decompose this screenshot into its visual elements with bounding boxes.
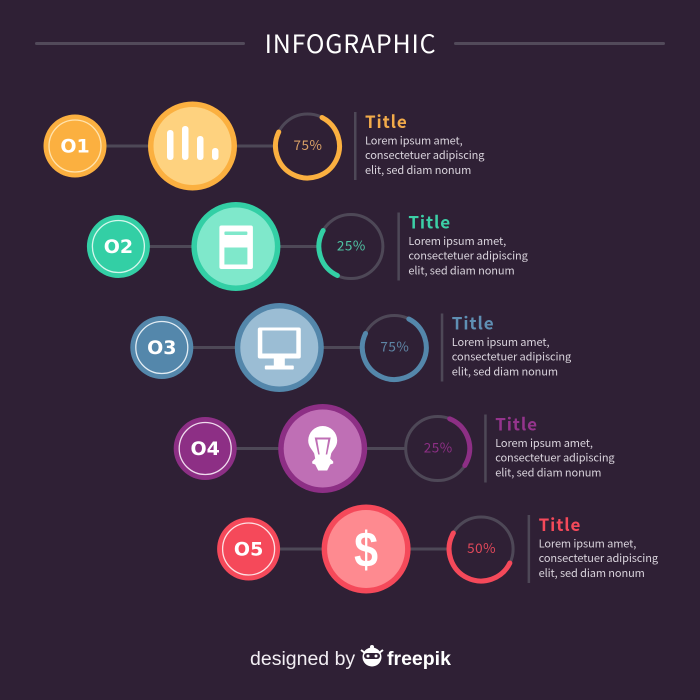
footer credit: freepik — [387, 648, 451, 670]
progress ring 25% — [308, 204, 393, 289]
text block 2: elit, sed diam nonum — [408, 262, 515, 278]
number badge 03: O3 — [147, 337, 176, 359]
number badge 02: O2 — [104, 236, 133, 258]
text block 1: Title — [365, 108, 408, 133]
number badge 02 — [87, 215, 150, 278]
footer credit — [250, 645, 451, 670]
text block 4: Title — [495, 410, 538, 436]
progress ring 75%: 75% — [294, 134, 322, 154]
progress ring 25%: 25% — [424, 436, 453, 456]
icon: bar chart — [148, 102, 237, 190]
text block 3: Title — [452, 310, 494, 334]
icon: freepik mascot — [361, 645, 383, 666]
progress ring 50%: 50% — [467, 537, 496, 557]
icon: light bulb — [278, 404, 367, 493]
text block 3: Lorem ipsum amet, — [452, 334, 549, 350]
icon: document panel — [191, 202, 280, 291]
text block 4: elit, sed diam nonum — [495, 464, 601, 480]
progress ring 25%: 25% — [337, 234, 366, 254]
text block 2: consectetuer adipiscing — [408, 248, 529, 264]
progress ring 50% — [438, 506, 524, 592]
progress ring 75% — [264, 103, 351, 189]
text block 3: consectetuer adipiscing — [452, 348, 572, 364]
text block 3: elit, sed diam nonum — [452, 364, 558, 380]
title: INFOGRAPHIC — [265, 25, 436, 61]
text block 1 — [365, 108, 485, 178]
text block 5 — [539, 511, 659, 581]
number badge 04 — [174, 417, 237, 480]
text block 1: Lorem ipsum amet, — [365, 132, 463, 148]
text block 2: Lorem ipsum amet, — [408, 233, 506, 249]
number badge 05: O5 — [234, 538, 263, 560]
number badge 03 — [130, 316, 193, 379]
number badge 04: O4 — [191, 438, 220, 460]
row 1 — [44, 102, 485, 190]
text block 5: Lorem ipsum amet, — [539, 536, 636, 552]
text block 4 — [495, 410, 615, 480]
number badge 01 — [44, 114, 106, 178]
progress ring 75%: 75% — [380, 336, 409, 356]
text block 2: Title — [408, 208, 451, 234]
progress ring 75% — [351, 304, 437, 391]
row 4 — [174, 404, 615, 493]
icon: monitor — [235, 303, 324, 392]
text block 4: Lorem ipsum amet, — [495, 435, 593, 451]
number badge 01: O1 — [60, 136, 90, 158]
footer credit: designed by — [250, 648, 355, 670]
text block 1: consectetuer adipiscing — [365, 147, 485, 163]
text block 5: elit, sed diam nonum — [539, 565, 645, 581]
text block 5: consectetuer adipiscing — [539, 550, 659, 566]
icon: dollar sign: $ — [354, 522, 378, 578]
text block 5: Title — [539, 511, 581, 536]
row 5 — [217, 504, 659, 594]
icon: dollar sign — [322, 504, 411, 594]
text block 3 — [452, 310, 572, 380]
progress ring 25% — [396, 407, 479, 490]
row 2 — [87, 202, 529, 291]
number badge 05 — [217, 518, 280, 580]
text block 2 — [408, 208, 529, 278]
text block 4: consectetuer adipiscing — [495, 450, 615, 466]
row 3 — [130, 303, 572, 392]
text block 1: elit, sed diam nonum — [365, 162, 471, 178]
